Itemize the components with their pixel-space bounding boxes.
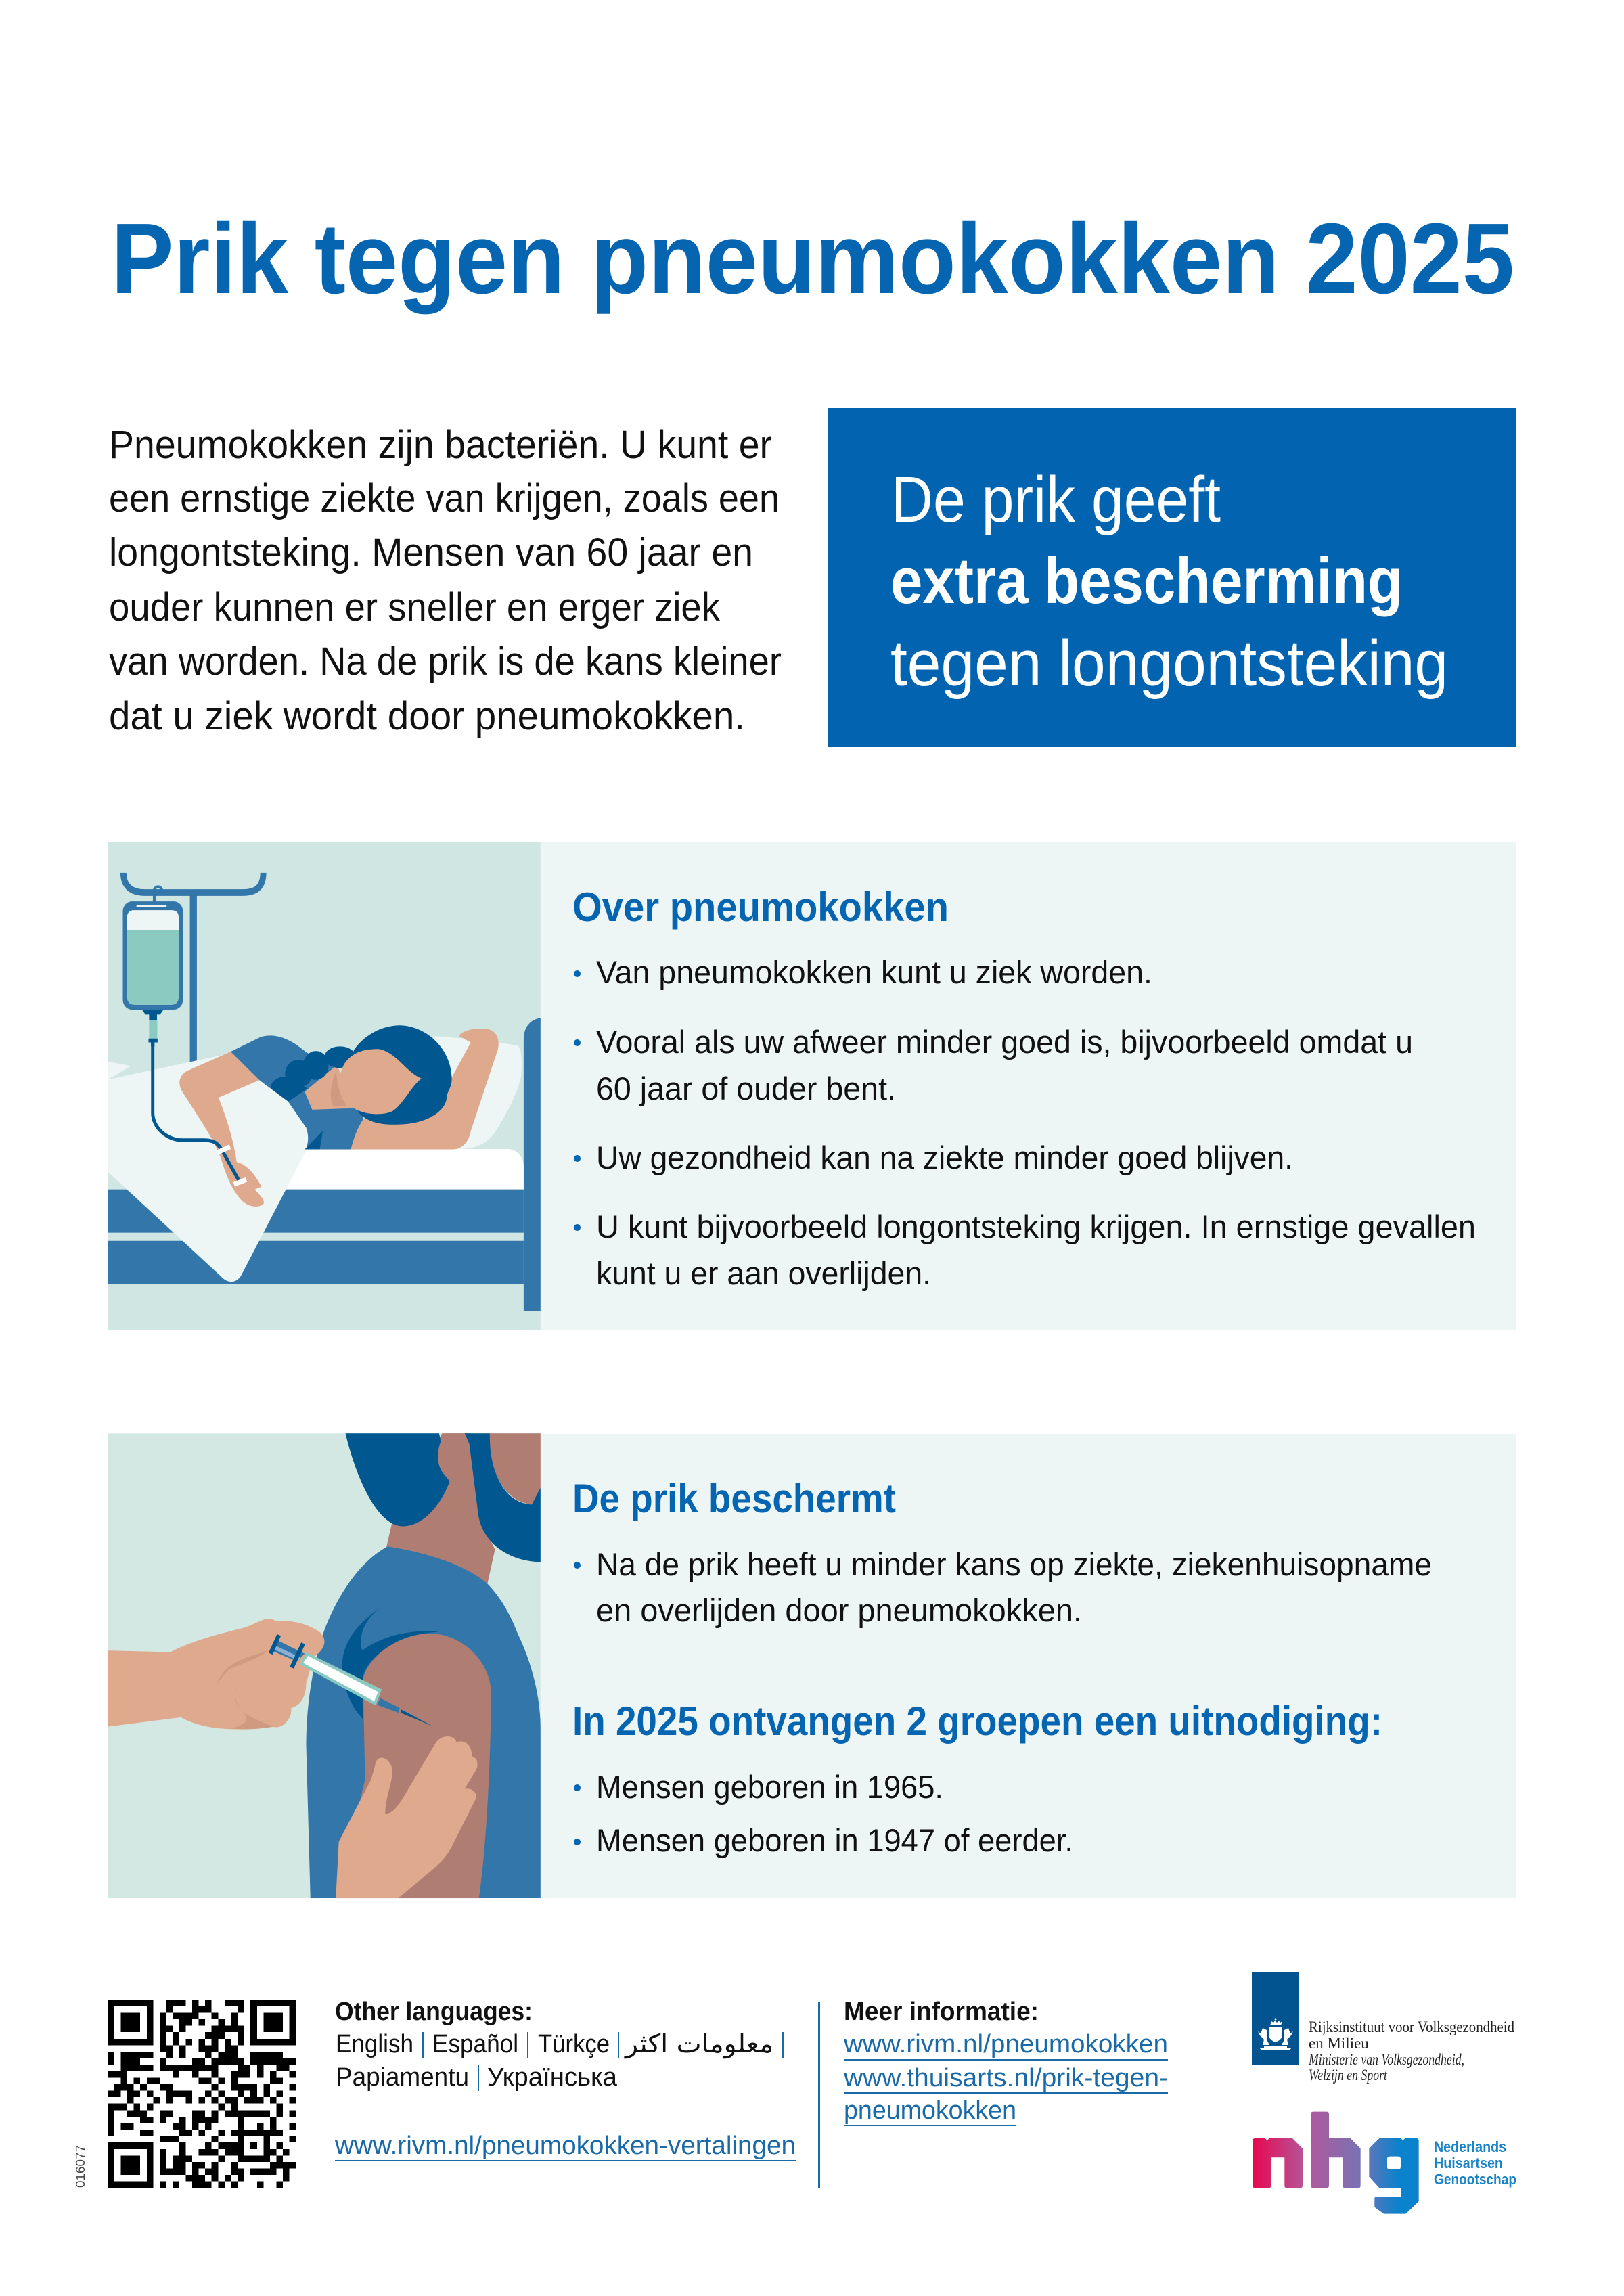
bullet: protection bbox=[574, 1546, 1432, 1628]
more information block: pneumokokken bbox=[844, 2096, 1016, 2125]
bullet list: facts: 60 jaar of ouder bent. bbox=[596, 1071, 896, 1106]
panel: over pneumokokken bbox=[108, 842, 1516, 1330]
other languages block: Türkçe bbox=[538, 2030, 610, 2058]
bullet list: facts: U kunt bijvoorbeeld longontsteking krijgen. In ernstige gevallen bbox=[596, 1209, 1476, 1244]
bullet list: facts: Uw gezondheid kan na ziekte minder goed blijven. bbox=[596, 1140, 1293, 1175]
other languages block: Papiamentu bbox=[336, 2063, 469, 2092]
other languages block: Español bbox=[432, 2030, 518, 2058]
intro text block: longontsteking. Mensen van 60 jaar en bbox=[109, 531, 753, 575]
logo: RIVM: Rijksinstituut voor Volksgezondheid bbox=[1309, 2019, 1514, 2035]
panel: de prik beschermt bbox=[108, 1433, 1516, 1898]
logo: NHG bbox=[1253, 2112, 1516, 2214]
more information block: www.rivm.nl/pneumokokken bbox=[843, 2030, 1168, 2058]
bullet list: invited groups bbox=[574, 1769, 1073, 1858]
logo: RIVM: Ministerie van Volksgezondheid, bbox=[1308, 2051, 1464, 2068]
logo: RIVM: en Milieu bbox=[1309, 2035, 1369, 2052]
heading: invited groups: In 2025 ontvangen 2 groepen een uitnodiging: bbox=[572, 1698, 1382, 1744]
logo: NHG: Genootschap bbox=[1434, 2171, 1516, 2188]
other languages block: Українська bbox=[487, 2063, 618, 2092]
illustration: vaccination in upper arm bbox=[108, 1433, 541, 1898]
more information block: www.thuisarts.nl/prik-tegen- bbox=[843, 2064, 1168, 2092]
heading: de prik beschermt: De prik beschermt bbox=[572, 1476, 896, 1521]
bullet: protection: Na de prik heeft u minder kans op ziekte, ziekenhuisopname bbox=[596, 1546, 1432, 1582]
intro text block: dat u ziek wordt door pneumokokken. bbox=[109, 694, 745, 738]
bullet list: facts bbox=[574, 954, 1476, 1291]
link: translations: www.rivm.nl/pneumokokken-vertalingen bbox=[334, 2132, 796, 2160]
heading: over pneumokokken: Over pneumokokken bbox=[572, 884, 949, 930]
bullet list: invited groups: Mensen geboren in 1947 of eerder. bbox=[596, 1822, 1073, 1858]
logo: RIVM: Welzijn en Sport bbox=[1309, 2067, 1387, 2084]
column divider bbox=[818, 2002, 820, 2188]
callout: extra protection bbox=[828, 408, 1516, 747]
intro text block: Pneumokokken zijn bacteriën. U kunt er bbox=[109, 423, 772, 467]
bullet list: facts: Van pneumokokken kunt u ziek worden. bbox=[596, 954, 1152, 990]
other languages block: English bbox=[336, 2030, 413, 2058]
other languages block: Other languages: bbox=[335, 1998, 533, 2026]
more information block: Meer informatie: bbox=[844, 1998, 1039, 2026]
other languages block: معلومات اكثر bbox=[624, 2029, 773, 2059]
icon: coat of arms bbox=[1258, 2018, 1293, 2050]
logo: NHG: Nederlands bbox=[1434, 2138, 1506, 2155]
callout: extra protection: tegen longontsteking bbox=[890, 627, 1448, 700]
illustration: patient in hospital bed with IV drip bbox=[108, 842, 541, 1330]
logo: NHG: Huisartsen bbox=[1434, 2155, 1503, 2171]
title: Prik tegen pneumokokken 2025 bbox=[111, 203, 1514, 315]
print code: 016077 bbox=[74, 2145, 87, 2188]
bullet list: facts: kunt u er aan overlijden. bbox=[596, 1255, 931, 1291]
bullet: protection: en overlijden door pneumokokken. bbox=[596, 1592, 1082, 1628]
QR code bbox=[108, 2000, 296, 2188]
logo: RIVM bbox=[1252, 1972, 1514, 2084]
more information block bbox=[843, 1998, 1168, 2126]
bullet list: facts: Vooral als uw afweer minder goed is, bijvoorbeeld omdat u bbox=[596, 1024, 1413, 1060]
intro text block: ouder kunnen er sneller en erger ziek bbox=[109, 585, 721, 629]
intro text block bbox=[109, 423, 782, 738]
bullet list: invited groups: Mensen geboren in 1965. bbox=[596, 1769, 943, 1805]
callout: extra protection: extra bescherming bbox=[890, 545, 1403, 617]
callout: extra protection: De prik geeft bbox=[891, 464, 1221, 536]
intro text block: een ernstige ziekte van krijgen, zoals een bbox=[109, 476, 780, 520]
intro text block: van worden. Na de prik is de kans kleiner bbox=[109, 639, 782, 683]
other languages block bbox=[334, 1998, 796, 2161]
